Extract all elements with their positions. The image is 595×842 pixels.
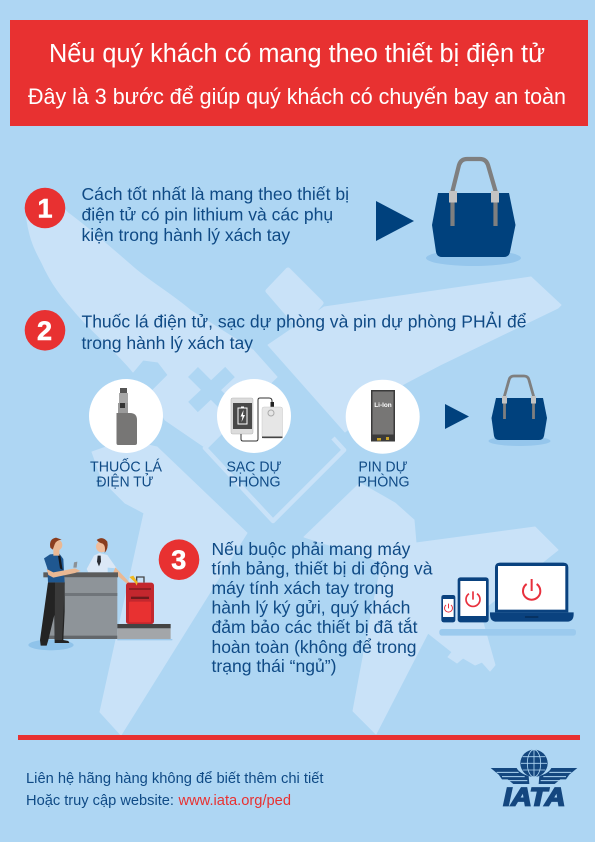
counter top xyxy=(43,572,118,577)
passenger xyxy=(40,582,69,646)
step 1 text xyxy=(82,184,349,245)
icon: hand bag large xyxy=(426,159,521,266)
step 3 text: đảm bảo các thiết bị đã tắt xyxy=(212,617,418,637)
label: power bank: SẠC DỰ xyxy=(226,458,282,476)
step 3 badge: 3 xyxy=(171,545,186,575)
step 1 text: kiện trong hành lý xách tay xyxy=(82,225,291,245)
label: e-cigarette xyxy=(90,458,162,490)
label: spare battery: PHÒNG xyxy=(358,474,410,490)
arrow: step 2 xyxy=(445,404,469,429)
step 3 text: máy tính xách tay trong xyxy=(212,578,394,598)
icon: spare battery xyxy=(346,380,420,454)
step 3 text: Nếu buộc phải mang máy xyxy=(212,539,411,559)
label: spare battery: PIN DỰ xyxy=(358,458,408,476)
step 3 text xyxy=(212,539,433,676)
laptop xyxy=(495,563,568,612)
step 2 text xyxy=(82,312,526,353)
logo: IATA xyxy=(491,750,577,812)
step 3 text: trạng thái “ngủ”) xyxy=(212,656,336,676)
staff member xyxy=(96,541,107,552)
footer contact text: www.iata.org/ped xyxy=(178,792,291,809)
step 2 badge: 2 xyxy=(37,316,52,346)
title banner xyxy=(10,20,588,126)
counter xyxy=(48,577,117,639)
label: spare battery xyxy=(358,458,410,490)
subtitle: Đây là 3 bước để giúp quý khách có chuyến bay an toàn xyxy=(28,84,566,109)
icon: hand bag small xyxy=(488,376,550,446)
step 1 text: Cách tốt nhất là mang theo thiết bị xyxy=(82,184,349,204)
step 1 badge xyxy=(25,188,65,228)
label: power bank: PHÒNG xyxy=(228,474,280,490)
label: e-cigarette: ĐIỆN TỬ xyxy=(96,472,154,490)
footer contact text: Liên hệ hãng hàng không để biết thêm chi tiết xyxy=(26,770,324,787)
label: e-cigarette: THUỐC LÁ xyxy=(90,458,162,476)
arrow: step 1 xyxy=(376,201,414,241)
suitcase xyxy=(137,577,144,583)
step 2 badge xyxy=(25,310,65,351)
step 2 text: trong hành lý xách tay xyxy=(82,333,253,353)
luggage tag xyxy=(129,576,138,586)
footer contact text: Hoặc truy cập website: xyxy=(26,792,174,809)
step 3 badge xyxy=(159,539,199,580)
illustration: check-in counter xyxy=(28,538,172,650)
phone xyxy=(441,595,455,622)
step 1 badge: 1 xyxy=(37,194,53,224)
step 1 text: điện tử có pin lithium và các phụ xyxy=(82,204,333,224)
background: airplane cross mark xyxy=(193,372,230,407)
step 3 text: hoàn toàn (không để trong xyxy=(212,637,416,657)
step 2 text: Thuốc lá điện tử, sạc dự phòng và pin dự phòng PHẢI để xyxy=(82,312,526,332)
logo: IATA: IATA xyxy=(503,785,565,812)
tablet xyxy=(458,577,489,622)
conveyor xyxy=(117,628,171,639)
icon: devices powered off xyxy=(439,563,576,636)
label: power bank xyxy=(226,458,282,490)
step 3 text: tính bảng, thiết bị di động và xyxy=(212,558,433,578)
background: airplane silhouette xyxy=(27,193,561,735)
divider xyxy=(18,735,580,740)
footer contact text xyxy=(26,770,324,809)
icon: spare battery: Li-Ion xyxy=(374,402,392,409)
icon: power bank xyxy=(217,379,291,453)
icon: e-cigarette xyxy=(89,379,163,453)
title: Nếu quý khách có mang theo thiết bị điện tử xyxy=(49,40,545,68)
step 3 text: hành lý ký gửi, quý khách xyxy=(212,598,410,618)
